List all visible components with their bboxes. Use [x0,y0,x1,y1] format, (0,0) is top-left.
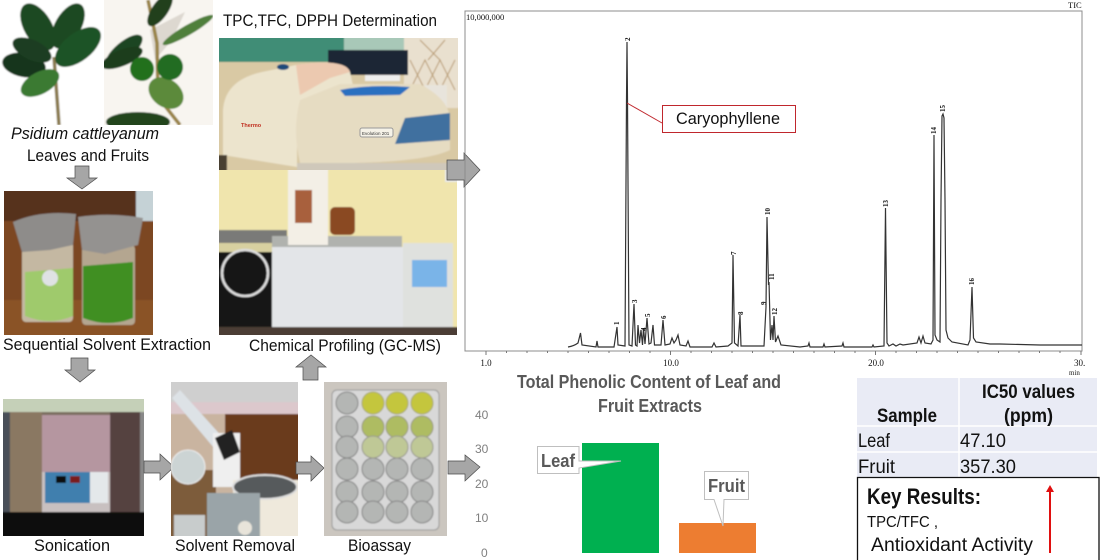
axis labels: 1.0 [480,358,492,368]
peak numbers: 9 [760,301,768,305]
panel: key results: Key Results: [867,484,981,509]
bar chart: total phenolic content [475,408,756,560]
peak numbers: 14 [930,126,938,134]
bioassay caption: Bioassay [348,537,412,555]
peak numbers: 1 [613,321,621,325]
bar chart: total phenolic content: 10 [475,511,489,525]
axis labels: 20.0 [868,358,884,368]
photo: sequential solvent extraction beakers [4,191,153,335]
callout: Caryophyllene [627,103,796,132]
heading: TPC TFC DPPH determination: TPC,TFC, DPPH Determination [223,12,437,30]
heading: total phenolic content chart: Total Phenolic Content of Leaf and [517,372,781,392]
callout: fruit [704,472,748,526]
table: IC50 values: (ppm) [1004,406,1053,427]
arrow: bioassay to chemical profiling [296,355,326,380]
peak numbers: 16 [968,278,976,285]
sonication caption: Sonication [34,537,110,555]
axis labels: TIC [1068,0,1082,10]
bar chart: total phenolic content: 0 [481,546,488,560]
arrow: solvent removal to bioassay [296,456,324,481]
axis labels [466,0,1085,377]
arrow: leaves to extraction [67,166,97,189]
arrow: red increase [1046,485,1054,553]
axis labels: 30. [1074,358,1085,368]
table: IC50 values: Fruit [858,457,896,478]
extraction caption: Sequential Solvent Extraction [3,336,211,354]
axis labels: 10.0 [663,358,679,368]
photo: bioassay well plate [324,382,447,536]
axis ticks [486,351,1081,355]
callout: Caryophyllene: Caryophyllene [676,110,780,128]
photo: UV-Vis spectrophotometer: Evolution 201 [362,131,390,136]
callout: leaf [538,446,621,474]
bar: leaf [582,443,659,553]
heading: total phenolic content chart: Fruit Extracts [598,396,702,416]
arrow: extraction to sonication [65,358,95,382]
bar chart: total phenolic content: 30 [475,442,489,456]
table: IC50 values [857,378,1097,478]
table: IC50 values: Leaf [858,431,891,452]
peak numbers: 8 [737,311,745,315]
peak numbers: 13 [882,200,890,207]
peak numbers: 11 [768,273,776,280]
species caption: Leaves and Fruits [27,147,149,165]
panel: key results: Antioxidant Activity [871,535,1033,556]
callout: fruit: Fruit [708,476,745,496]
peak numbers: 6 [660,315,668,319]
bar: fruit [679,523,756,553]
panel: key results: TPC/TFC , [867,514,938,531]
arrow: instruments to chromatogram [447,153,480,187]
chromatogram trace [568,42,1082,347]
callout: leaf: Leaf [541,451,576,471]
table: IC50 values: 357.30 [960,457,1016,478]
photo: rotary evaporator [171,382,298,536]
peak numbers: 2 [624,37,632,41]
arrow: bioassay to chart [448,455,480,481]
peak numbers: 12 [771,308,779,315]
species caption: Psidium cattleyanum [11,124,159,143]
photo: psidium fruits [104,0,213,125]
peak numbers: 10 [764,208,772,215]
peak numbers: 5 [644,313,652,317]
solvent removal caption: Solvent Removal [175,537,295,555]
chart: GC-MS total ion chromatogram [465,0,1085,377]
photo: psidium leaves [0,0,108,125]
photo: UV-Vis spectrophotometer [215,34,462,174]
photo: UV-Vis spectrophotometer: Thermo [241,123,262,129]
table: IC50 values: 47.10 [960,431,1006,452]
heading: total phenolic content chart [517,372,781,416]
chemical profiling caption: Chemical Profiling (GC-MS) [249,337,441,355]
species caption [11,124,159,165]
axis labels: min [1069,369,1080,377]
axis labels: 10,000,000 [466,12,504,22]
table: IC50 values: IC50 values [982,382,1075,403]
peak numbers: 4 [640,327,648,331]
table: IC50 values: Sample [877,406,937,427]
arrow: sonication to solvent removal [144,454,174,480]
panel: key results [858,478,1099,560]
photo: sonication bath [0,395,148,540]
photo: GC-MS instrument [215,166,461,339]
peak numbers: 3 [631,299,639,303]
bar chart: total phenolic content: 40 [475,408,489,422]
peak numbers [613,37,976,331]
bar chart: total phenolic content: 20 [475,477,489,491]
peak numbers: 7 [730,251,738,255]
peak numbers: 15 [939,104,947,112]
